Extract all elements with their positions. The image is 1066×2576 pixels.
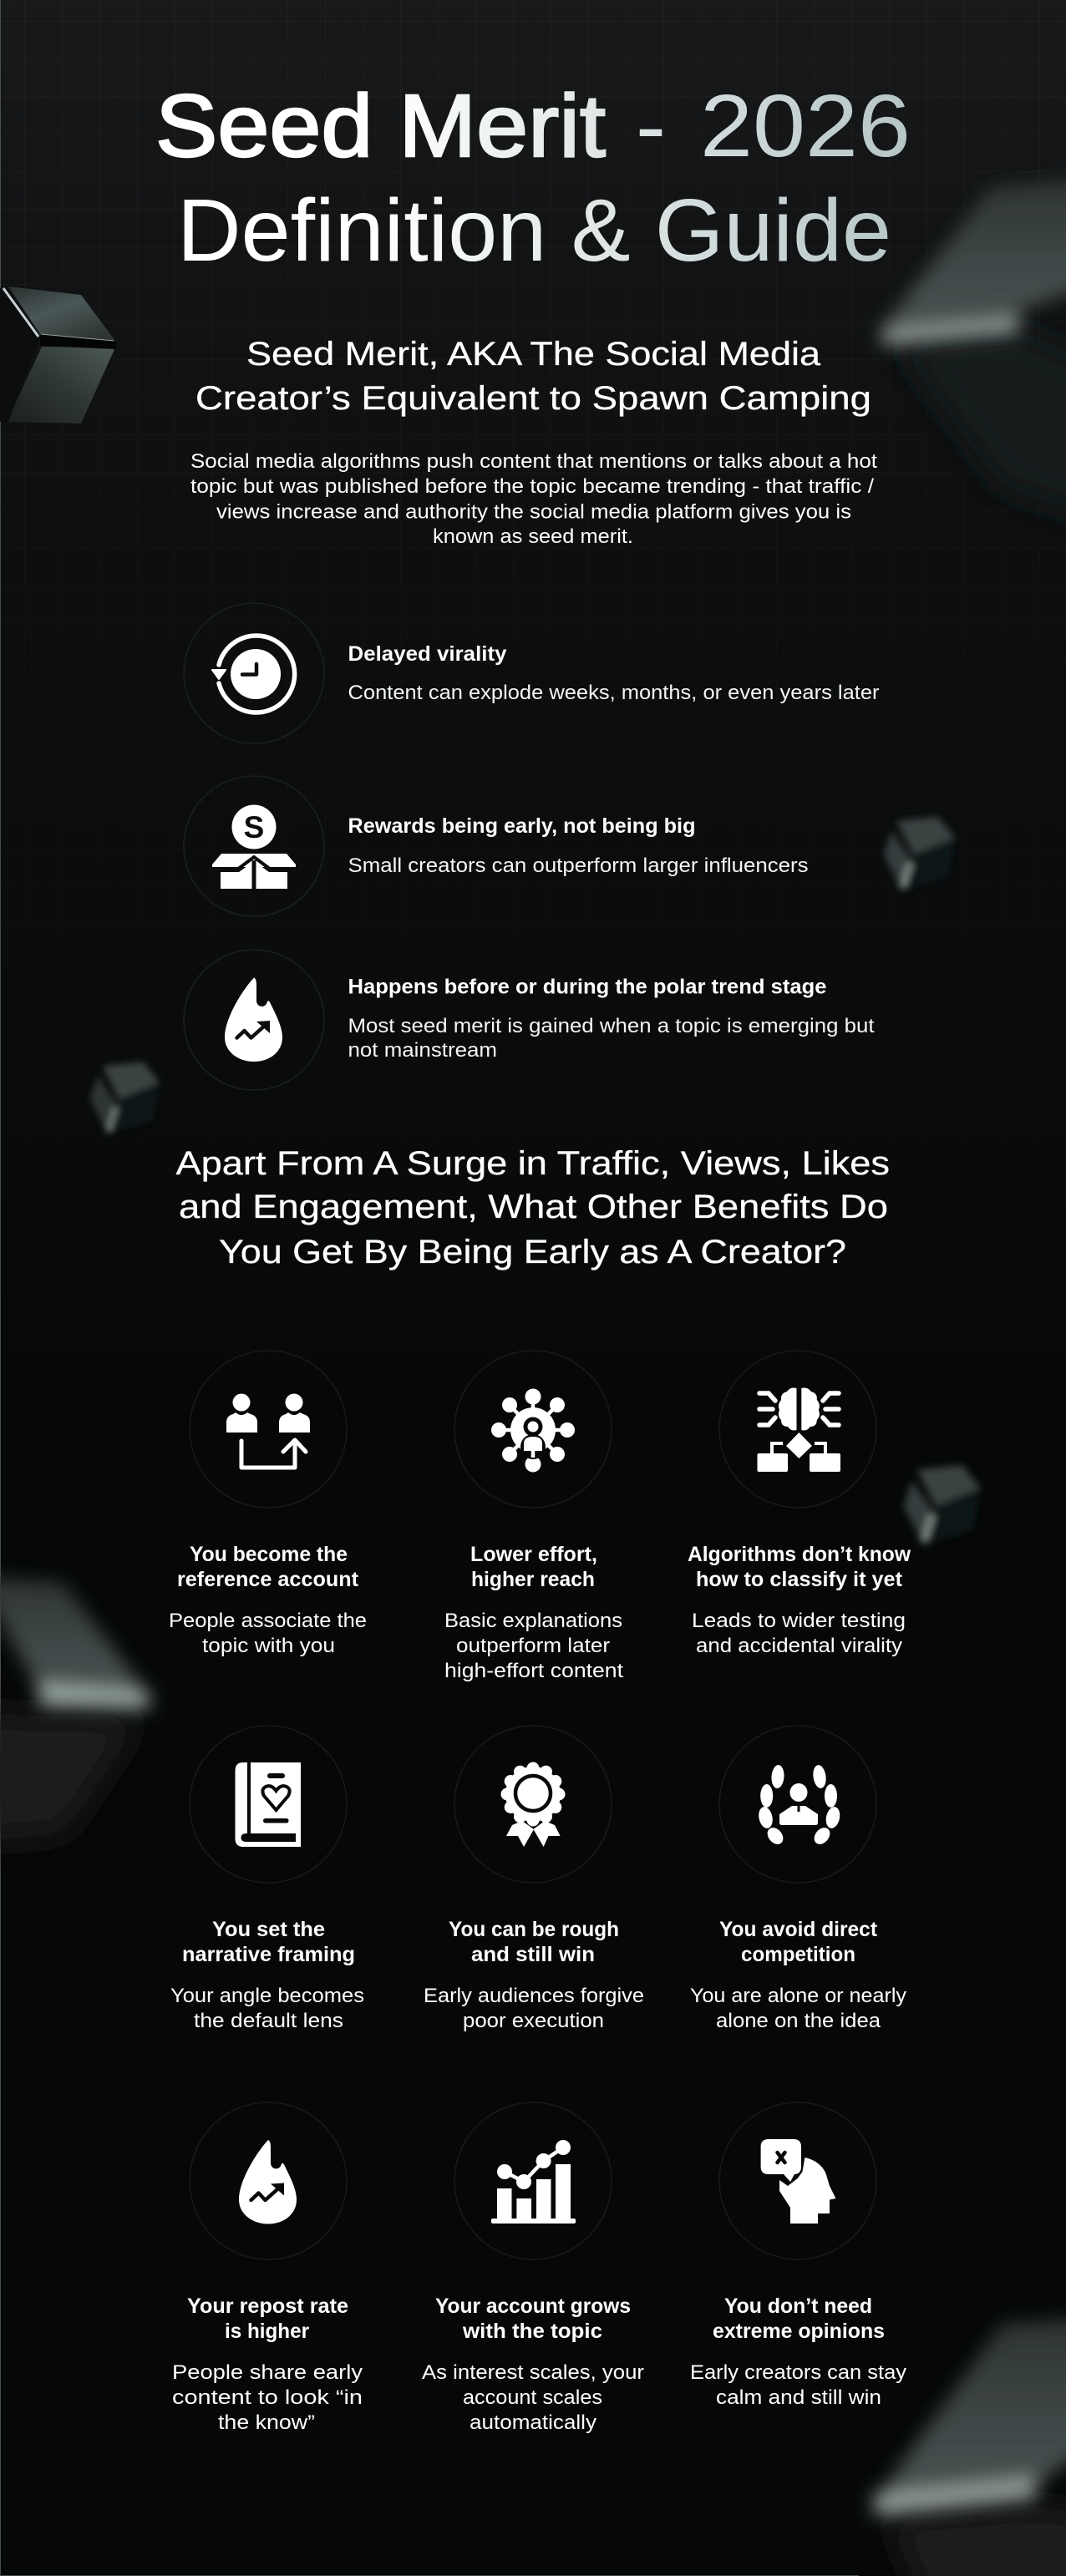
- feature: delayed virality: [184, 603, 879, 743]
- section heading: and Engagement, What Other Benefits Do: [179, 1189, 888, 1225]
- card title: [182, 1918, 355, 1966]
- card description: [692, 1610, 906, 1657]
- card title: how to classify it yet: [696, 1568, 903, 1591]
- decorative cube: right small lower: [904, 1465, 980, 1545]
- card description: Early audiences forgive: [424, 1985, 644, 2007]
- card description: the know”: [218, 2411, 315, 2434]
- feature text: Rewards being early, not being big: [348, 814, 695, 838]
- card title: You don’t need: [724, 2295, 872, 2318]
- card description: [172, 2361, 363, 2434]
- feature text: Content can explode weeks, months, or even years later: [348, 682, 879, 704]
- card title: reference account: [177, 1568, 359, 1591]
- decorative cube: top left: [0, 287, 116, 423]
- card description: account scales: [463, 2386, 602, 2409]
- title: Seed Merit: [155, 77, 606, 175]
- card title: [688, 1543, 911, 1591]
- card description: alone on the idea: [716, 2010, 881, 2032]
- card: repost rate: [172, 2102, 363, 2434]
- card description: [424, 1985, 644, 2032]
- card description: Basic explanations: [444, 1610, 622, 1632]
- card description: As interest scales, your: [422, 2361, 644, 2384]
- icon: clock with return arrow: [184, 603, 324, 743]
- feature text: Delayed virality: [348, 642, 507, 666]
- card title: [713, 2295, 885, 2343]
- title: -: [636, 77, 666, 175]
- card description: [444, 1610, 623, 1682]
- card description: Your angle becomes: [170, 1985, 364, 2007]
- icon: flame with trend arrow: [184, 950, 324, 1090]
- card description: People associate the: [169, 1610, 367, 1632]
- title: [155, 77, 911, 280]
- feature: rewards being early: [184, 776, 809, 916]
- icon: coin above open box: S: [244, 810, 264, 844]
- icon: person in laurel wreath: [719, 1726, 876, 1883]
- card description: [690, 2361, 907, 2409]
- card title: higher reach: [471, 1568, 595, 1591]
- card: account grows: [422, 2102, 644, 2434]
- card description: You are alone or nearly: [690, 1985, 907, 2007]
- intro paragraph: [190, 450, 877, 548]
- icon: award rosette: [454, 1726, 612, 1883]
- card description: calm and still win: [716, 2386, 881, 2409]
- title: Definition & Guide: [177, 181, 891, 280]
- card description: automatically: [470, 2411, 597, 2434]
- card description: content to look “in: [172, 2386, 363, 2409]
- intro paragraph: known as seed merit.: [433, 525, 633, 548]
- card: lower effort: [444, 1351, 623, 1682]
- card title: [470, 1543, 597, 1591]
- feature text: [348, 642, 879, 704]
- card title: You become the: [190, 1543, 348, 1566]
- card description: [169, 1610, 367, 1657]
- card description: [170, 1985, 364, 2032]
- icon: bar chart with rising line: [454, 2102, 612, 2259]
- feature text: not mainstream: [348, 1039, 497, 1062]
- section heading: You Get By Being Early as A Creator?: [219, 1234, 846, 1270]
- card title: [449, 1918, 619, 1966]
- icon: coin above open box: [184, 776, 324, 916]
- card description: People share early: [172, 2361, 363, 2384]
- section heading: [175, 1145, 890, 1270]
- card title: with the topic: [462, 2320, 602, 2343]
- card title: Your account grows: [435, 2295, 631, 2318]
- card title: competition: [741, 1943, 855, 1966]
- icon: network virus with person: [454, 1351, 612, 1508]
- icon: book with heart: [190, 1726, 347, 1883]
- icon: flame with trend arrow: [190, 2102, 347, 2259]
- card title: and still win: [471, 1943, 595, 1966]
- feature text: Happens before or during the polar trend stage: [348, 976, 827, 999]
- intro paragraph: topic but was published before the topic became trending - that traffic /: [190, 475, 874, 498]
- subheading: Creator’s Equivalent to Spawn Camping: [195, 380, 871, 417]
- card description: [422, 2361, 644, 2434]
- card description: topic with you: [202, 1635, 335, 1657]
- card title: is higher: [225, 2320, 309, 2343]
- feature text: [348, 976, 875, 1062]
- card description: the default lens: [194, 2010, 343, 2032]
- card title: Algorithms don’t know: [688, 1543, 911, 1566]
- card description: Leads to wider testing: [692, 1610, 906, 1632]
- icon: two people with arrow: [190, 1351, 347, 1508]
- feature: happens before polar trend: [184, 950, 875, 1090]
- card: extreme opinions: [690, 2102, 907, 2409]
- card description: and accidental virality: [696, 1635, 903, 1657]
- card title: [719, 1918, 878, 1966]
- card description: [690, 1985, 907, 2032]
- intro paragraph: views increase and authority the social media platform gives you is: [216, 501, 851, 523]
- card title: [177, 1543, 359, 1591]
- subheading: Seed Merit, AKA The Social Media: [246, 336, 821, 373]
- card title: You avoid direct: [719, 1918, 878, 1941]
- card: narrative framing: [170, 1726, 364, 2032]
- card title: narrative framing: [182, 1943, 355, 1966]
- decorative cube: mid left small: [90, 1062, 160, 1135]
- decorative cube: top right blurred: [882, 177, 1066, 518]
- card description: high-effort content: [444, 1660, 623, 1682]
- decorative cube: mid right small: [884, 817, 955, 891]
- icon: head with speech bubble: [719, 2102, 876, 2259]
- section heading: Apart From A Surge in Traffic, Views, Likes: [175, 1145, 890, 1182]
- decorative cube: left blurred: [0, 1577, 149, 1842]
- card: avoid competition: [690, 1726, 907, 2032]
- card: algorithms: [688, 1351, 911, 1657]
- card: rough and still win: [424, 1726, 644, 2032]
- card description: poor execution: [463, 2010, 604, 2032]
- subheading: [195, 336, 871, 417]
- card title: [435, 2295, 631, 2343]
- card description: Early creators can stay: [690, 2361, 907, 2384]
- card title: [187, 2295, 348, 2343]
- decorative cube: bottom right blurred: [873, 2318, 1066, 2576]
- card title: You set the: [212, 1918, 325, 1941]
- title: 2026: [700, 77, 911, 175]
- card title: You can be rough: [449, 1918, 619, 1941]
- icon: brain with decision flow: [719, 1351, 876, 1508]
- feature text: [348, 814, 809, 877]
- feature text: Small creators can outperform larger influencers: [348, 854, 809, 877]
- card title: Lower effort,: [470, 1543, 597, 1566]
- card title: extreme opinions: [713, 2320, 885, 2343]
- feature text: Most seed merit is gained when a topic is emerging but: [348, 1015, 875, 1037]
- card: reference account: [169, 1351, 367, 1657]
- card title: Your repost rate: [187, 2295, 348, 2318]
- intro paragraph: Social media algorithms push content that mentions or talks about a hot: [190, 450, 877, 473]
- card description: outperform later: [456, 1635, 610, 1657]
